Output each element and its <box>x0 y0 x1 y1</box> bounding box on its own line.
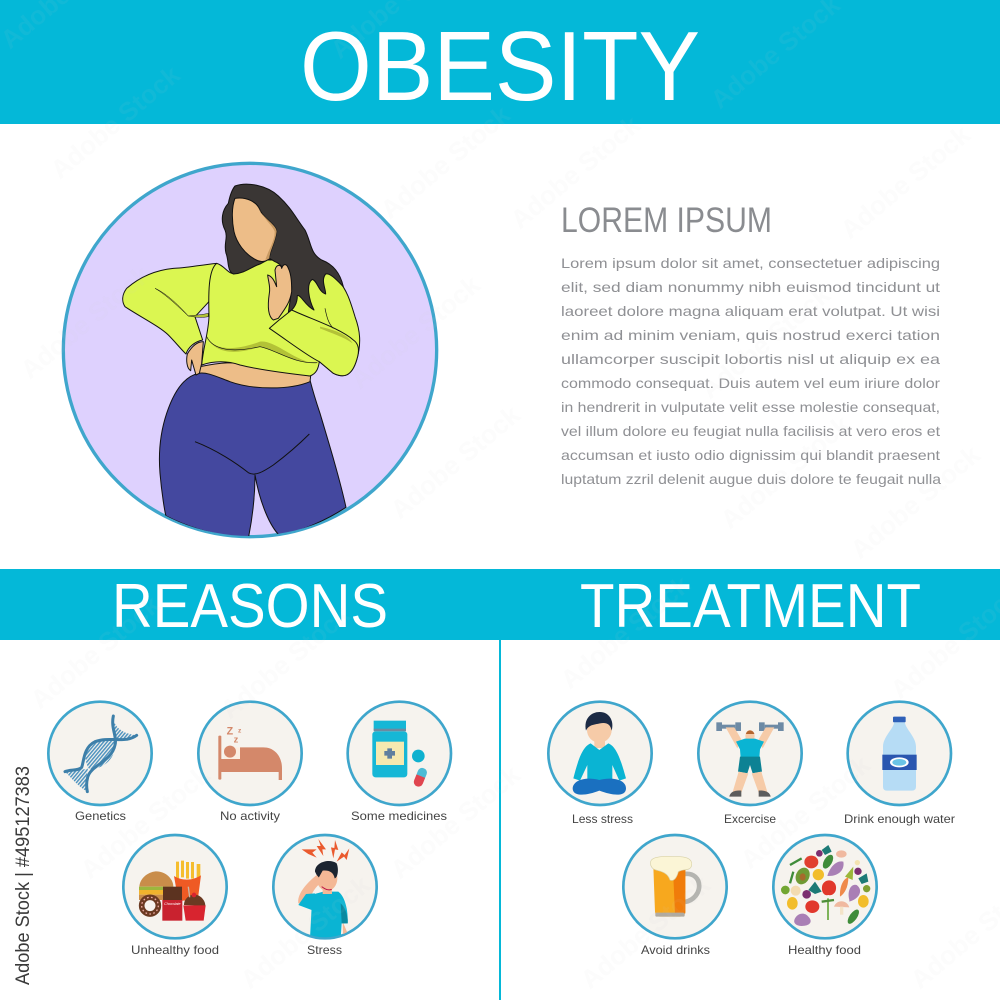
labels: reasons: Some medicines <box>351 809 447 823</box>
text: Adobe Stock <box>695 279 836 405</box>
section banner: reasons and treatment: REASONS <box>112 572 388 641</box>
labels: treatment <box>572 812 955 957</box>
icon: genetics dna <box>48 702 152 805</box>
text: Adobe Stock <box>845 439 986 565</box>
heading: lorem ipsum: LOREM IPSUM <box>561 201 772 240</box>
labels: reasons: Genetics <box>75 809 126 823</box>
labels: treatment: Excercise <box>724 812 776 826</box>
top banner <box>0 0 1000 124</box>
labels: reasons <box>75 809 447 957</box>
text: Adobe Stock <box>45 59 186 185</box>
labels: treatment: Healthy food <box>788 943 861 957</box>
icon: exercise with dumbbells <box>698 702 802 805</box>
text: Adobe Stock <box>15 259 156 385</box>
text block: paragraph: Lorem ipsum dolor sit amet, consectetuer adipiscing <box>561 255 940 271</box>
icon: unhealthy food <box>123 835 227 938</box>
icon: bed: z <box>234 735 239 745</box>
text: Adobe Stock <box>25 589 166 715</box>
text block: paragraph: laoreet dolore magna aliquam erat volutpat. Ut wisi <box>561 303 940 319</box>
icon: healthy food <box>773 835 877 938</box>
text block: paragraph: commodo consequat. Duis autem vel eum iriure dolor <box>561 375 940 391</box>
labels: reasons: No activity <box>220 809 280 823</box>
text: Adobe Stock <box>735 749 876 875</box>
icon: beer mug <box>623 835 727 938</box>
text: Adobe Stock <box>385 759 526 885</box>
text: Adobe Stock <box>835 119 976 245</box>
text: Adobe Stock <box>215 599 356 725</box>
icon: medicine bottle and pills <box>348 702 451 805</box>
text block: paragraph: enim ad minim veniam, quis nostrud exerci tation <box>561 327 940 343</box>
text block: paragraph: in hendrerit in vulputate velit esse molestie consequat, <box>561 399 940 415</box>
labels: treatment: Less stress <box>572 812 633 826</box>
text: Adobe Stock <box>375 99 516 225</box>
panel: treatment icons <box>548 702 951 938</box>
icon: water bottle <box>848 702 951 805</box>
section banner: reasons and treatment: TREATMENT <box>580 572 921 641</box>
text: Adobe Stock <box>235 869 376 995</box>
side credit text: Adobe Stock | #495127383 <box>13 766 34 985</box>
icon: bed: Z <box>227 725 234 737</box>
panel: illustration of woman <box>63 163 437 538</box>
text: Adobe Stock <box>715 409 856 535</box>
labels: treatment: Avoid drinks <box>641 943 710 957</box>
text block: paragraph: vel illum dolore eu feugiat nulla facilisis at vero eros et <box>561 423 940 439</box>
text: Adobe Stock <box>575 869 716 995</box>
text block: paragraph <box>561 255 941 487</box>
text block: paragraph: accumsan et iusto odio dignissim qui blandit praesent <box>561 447 940 463</box>
text: Adobe Stock <box>345 269 486 395</box>
labels: reasons: Unhealthy food <box>131 943 219 957</box>
labels: reasons: Stress <box>307 943 342 957</box>
icon: stress man <box>273 835 377 938</box>
panel: reasons icons <box>48 702 451 938</box>
text: Adobe Stock <box>505 109 646 235</box>
section banner: reasons and treatment <box>0 569 1000 641</box>
text block: paragraph: elit, sed diam nonummy nibh euismod tincidunt ut <box>561 279 940 295</box>
text block: paragraph: luptatum zzril delenit augue duis dolore te feugait nulla <box>561 471 941 487</box>
text: Adobe Stock <box>75 759 216 885</box>
icon: bed: z <box>238 728 242 735</box>
icon: meditating man <box>548 702 652 805</box>
text block: paragraph: ullamcorper suscipit lobortis nisl ut aliquip ex ea <box>561 351 940 367</box>
icon: unhealthy food: Chocolate <box>164 902 181 906</box>
text: Adobe Stock <box>555 569 696 695</box>
labels: treatment: Drink enough water <box>844 812 955 826</box>
top banner: OBESITY <box>300 11 700 121</box>
icon: bed <box>198 702 302 805</box>
text: Adobe Stock <box>385 399 526 525</box>
